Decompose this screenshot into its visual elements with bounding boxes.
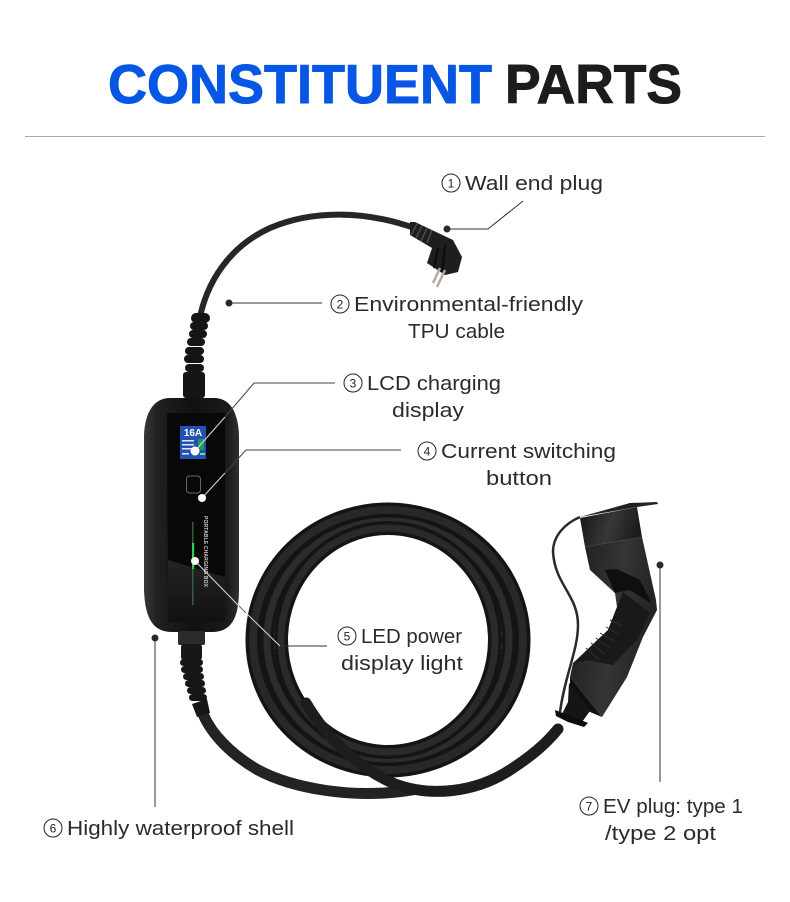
title: PARTS [505, 53, 682, 115]
cable: top TPU cable [199, 215, 417, 322]
box label text: PORTABLE CHARGING BOX [202, 516, 208, 588]
label 2: cable [331, 294, 583, 343]
label 5: LED light: LED power [361, 626, 462, 648]
title [108, 53, 682, 115]
control box [144, 398, 239, 632]
label 5: LED light: 5 [344, 630, 351, 644]
label 2: cable: TPU cable [408, 321, 505, 343]
label 3: LCD display: 3 [350, 376, 357, 390]
title: CONSTITUENT [108, 53, 492, 115]
label 5: LED light: display light [341, 653, 464, 675]
callout leader lines [155, 201, 660, 807]
icon: EV plug [553, 502, 658, 727]
label 6: waterproof shell: Highly waterproof shell [67, 818, 294, 840]
lcd display: 16A [184, 428, 202, 439]
label 7: EV plug: /type 2 opt [605, 823, 717, 845]
label 7: EV plug: EV plug: type 1 [603, 796, 743, 818]
header divider [25, 136, 765, 137]
label 7: EV plug [580, 796, 743, 845]
strain relief: lower [178, 631, 210, 717]
lcd display [180, 426, 206, 459]
label 4: switching button [418, 441, 616, 490]
label 6: waterproof shell: 6 [50, 822, 57, 836]
switching button [186, 476, 200, 493]
label 5: LED light [338, 626, 464, 675]
label 1: wall end plug: Wall end plug [465, 173, 603, 195]
label 2: cable: 2 [337, 298, 344, 312]
cable coil [253, 510, 523, 770]
callout dots [152, 226, 664, 642]
label 3: LCD display: LCD charging [367, 373, 501, 395]
strain relief: upper [183, 313, 210, 398]
label 4: switching button: button [486, 468, 552, 490]
label 1: wall end plug: 1 [448, 176, 455, 190]
label 3: LCD display: display [392, 400, 464, 422]
label 2: cable: Environmental-friendly [354, 294, 583, 316]
label 3: LCD display [344, 373, 501, 422]
label 4: switching button: 4 [424, 444, 431, 458]
cable: lower run to EV plug [203, 703, 558, 793]
icon: wall end plug [410, 222, 462, 287]
label 4: switching button: Current switching [441, 441, 616, 463]
label 7: EV plug: 7 [586, 800, 593, 814]
led light bar [192, 522, 194, 605]
